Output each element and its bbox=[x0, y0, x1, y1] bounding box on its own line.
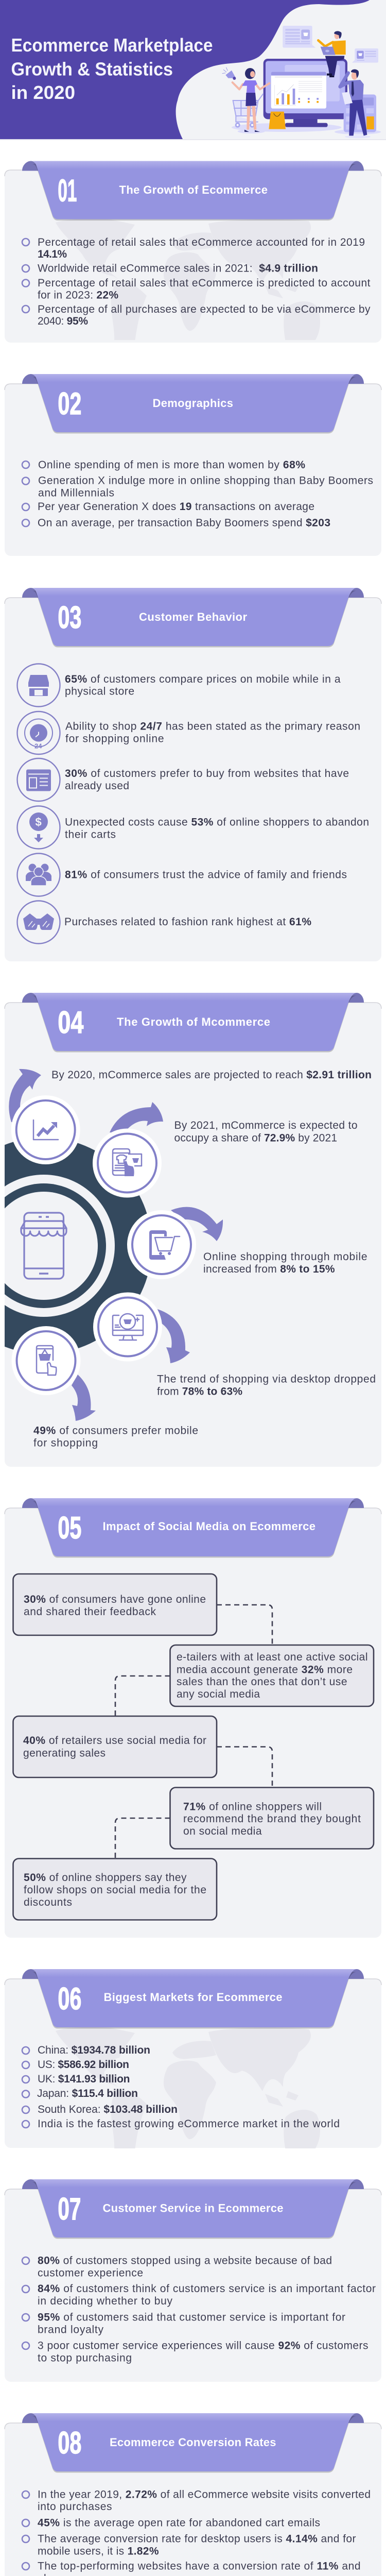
icon: mobile basket bbox=[11, 1326, 80, 1395]
stats list: 80% of customers stopped using a website because of bad bbox=[38, 2255, 332, 2267]
box: shared feedback: 30% of consumers have gone online bbox=[24, 1594, 206, 1605]
text: unexpected costs bbox=[65, 816, 369, 841]
text: mobile shopping growth: Online shopping through mobile bbox=[203, 1251, 367, 1263]
stats list: Percentage of all purchases are expected to be via eCommerce by bbox=[38, 303, 371, 315]
stats list: customer experience bbox=[38, 2267, 143, 2279]
text: fashion: Purchases related to fashion rank highest at 61% bbox=[64, 916, 311, 928]
stats list: 84% of customers think of customers service is an important factor bbox=[38, 2283, 376, 2295]
title bbox=[11, 35, 213, 103]
icon: sunglasses bbox=[17, 901, 60, 944]
text: desktop decline: The trend of shopping via desktop dropped bbox=[157, 1374, 376, 1385]
section heading: The Growth of Mcommerce bbox=[117, 1015, 270, 1028]
text: shop 24/7 bbox=[65, 720, 360, 745]
stats list: The top-performing websites have a conversion rate of 11% and bbox=[38, 2561, 360, 2572]
icon: desktop cart bbox=[93, 1292, 162, 1361]
stats list: into purchases bbox=[38, 2501, 112, 2513]
text: mcommerce share: occupy a share of 72.9% by 2021 bbox=[174, 1132, 337, 1144]
text: mobile shopping growth: increased from 8% to 15% bbox=[203, 1263, 335, 1275]
stats list bbox=[22, 459, 373, 529]
box: retailers: 40% of retailers use social media for bbox=[23, 1735, 206, 1747]
icon: falling dollar: $ bbox=[35, 816, 42, 828]
section heading: Impact of Social Media on Ecommerce bbox=[103, 1520, 315, 1533]
section number 03: 03 bbox=[58, 600, 81, 635]
stats list: to stop purchasing bbox=[38, 2352, 132, 2364]
panel: Demographics bbox=[5, 374, 381, 556]
section heading: Demographics bbox=[152, 397, 233, 410]
icon: family group bbox=[17, 853, 60, 896]
dashed connector B to C bbox=[115, 1676, 170, 1716]
stats list: Per year Generation X does 19 transactions on average bbox=[38, 501, 314, 513]
panel: Customer Service in Ecommerce bbox=[5, 2179, 381, 2382]
title: Growth & Statistics bbox=[11, 59, 173, 79]
section heading: Customer Behavior bbox=[139, 611, 247, 623]
box: e-tailers: media account generate 32% more bbox=[177, 1664, 353, 1675]
icon: 24 hour clock: 24 bbox=[34, 742, 42, 750]
arrow 4 bbox=[157, 1309, 190, 1363]
text: websites already used bbox=[65, 768, 349, 792]
box: shared feedback bbox=[13, 1574, 217, 1635]
text: websites already used: already used bbox=[65, 780, 129, 792]
box: e-tailers: sales than the ones that don’t use bbox=[177, 1676, 347, 1688]
text: unexpected costs: their carts bbox=[65, 828, 116, 841]
markets list: Japan: $115.4 billion bbox=[37, 2088, 138, 2099]
box: recommend brand bbox=[170, 1788, 374, 1849]
dashed connector A to B bbox=[217, 1605, 272, 1645]
markets list: India is the fastest growing eCommerce market in the world bbox=[38, 2118, 340, 2130]
icon: store bbox=[17, 664, 60, 707]
text: unexpected costs: Unexpected costs cause 53% of online shoppers to abandon bbox=[65, 816, 369, 828]
markets list: UK: $141.93 billion bbox=[38, 2073, 130, 2085]
text: sales projection: By 2020, mCommerce sales are projected to reach $2.91 trillion bbox=[51, 1069, 372, 1081]
panel: Impact of Social Media on Ecommerce bbox=[5, 1498, 381, 1938]
panel: The Growth of Mcommerce bbox=[0, 993, 381, 1467]
header illustration bbox=[222, 26, 381, 138]
panel: Ecommerce Conversion Rates bbox=[5, 2413, 381, 2576]
section heading: Customer Service in Ecommerce bbox=[103, 2202, 283, 2214]
stats list: Percentage of retail sales that eCommerce accounted for in 2019 bbox=[38, 236, 365, 248]
stats list: 3 poor customer service experiences will cause 92% of customers bbox=[38, 2340, 369, 2351]
text: prefer mobile: 49% of consumers prefer mobile bbox=[33, 1425, 198, 1436]
stats list: 14.1% bbox=[38, 248, 67, 260]
text: prefer mobile: for shopping bbox=[33, 1437, 98, 1449]
stats list: Worldwide retail eCommerce sales in 2021: $4.9 trillion bbox=[38, 263, 318, 274]
markets list bbox=[22, 2044, 340, 2130]
icon: mobile catalog bbox=[93, 1128, 162, 1197]
icon: mobile cart bbox=[127, 1210, 196, 1279]
title: Ecommerce Marketplace bbox=[11, 35, 213, 56]
icon: website bbox=[17, 758, 60, 801]
section number 05: 05 bbox=[58, 1511, 81, 1545]
markets list: US: $586.92 billion bbox=[38, 2059, 129, 2071]
stats list bbox=[22, 236, 371, 327]
markets list: China: $1934.78 billion bbox=[38, 2044, 150, 2056]
stats list: 95% of customers said that customer service is important for bbox=[38, 2311, 345, 2324]
markets list: South Korea: $103.48 billion bbox=[38, 2104, 178, 2115]
title: in 2020 bbox=[11, 82, 75, 103]
box: retailers bbox=[13, 1716, 217, 1777]
header banner bbox=[0, 0, 386, 140]
icon: falling dollar bbox=[17, 806, 60, 849]
section heading: Ecommerce Conversion Rates bbox=[110, 2436, 276, 2449]
box: retailers: generating sales bbox=[23, 1748, 106, 1759]
text: desktop decline bbox=[157, 1374, 376, 1397]
dashed connector D to E bbox=[115, 1818, 170, 1858]
section heading: Biggest Markets for Ecommerce bbox=[104, 1991, 282, 2004]
stats list: for in 2023: 22% bbox=[38, 290, 118, 301]
stats list: mobile users, it is 1.82% bbox=[38, 2545, 159, 2557]
text: mcommerce share bbox=[174, 1120, 357, 1144]
stats list: 2040: 95% bbox=[38, 315, 88, 327]
text: desktop decline: from 78% to 63% bbox=[157, 1386, 242, 1397]
text: mobile shopping growth bbox=[203, 1251, 367, 1275]
text: compare prices: physical store bbox=[65, 685, 134, 698]
box: follow shops: 50% of online shoppers say they bbox=[24, 1872, 187, 1884]
box: shared feedback: and shared their feedback bbox=[24, 1606, 156, 1618]
box: follow shops bbox=[13, 1859, 217, 1920]
stats list bbox=[22, 2488, 371, 2576]
box: recommend brand: 71% of online shoppers will bbox=[183, 1801, 322, 1812]
section number 01: 01 bbox=[58, 173, 77, 208]
section number 08: 08 bbox=[58, 2426, 81, 2460]
panel: Biggest Markets for Ecommerce bbox=[5, 1969, 381, 2150]
text: mcommerce share: By 2021, mCommerce is expected to bbox=[174, 1120, 357, 1131]
box: e-tailers: any social media bbox=[177, 1688, 260, 1700]
arrow 5 bbox=[72, 1375, 96, 1421]
section number 07: 07 bbox=[58, 2192, 81, 2226]
arrow 1 bbox=[9, 1069, 41, 1123]
box: recommend brand: on social media bbox=[183, 1825, 262, 1837]
section number 02: 02 bbox=[58, 386, 81, 421]
text: prefer mobile bbox=[33, 1425, 198, 1449]
icon: growth chart bbox=[11, 1095, 80, 1164]
icon: 24 hour clock bbox=[17, 711, 60, 754]
stats list: Online spending of men is more than women by 68% bbox=[38, 459, 305, 471]
text: shop 24/7: for shopping online bbox=[65, 733, 164, 745]
text: family and friends: 81% of consumers trust the advice of family and friends bbox=[65, 869, 347, 881]
stats list: and Millennials bbox=[38, 487, 114, 499]
stats list: In the year 2019, 2.72% of all eCommerce website visits converted bbox=[38, 2488, 371, 2501]
stats list: brand loyalty bbox=[38, 2324, 104, 2336]
box: follow shops: discounts bbox=[24, 1896, 72, 1908]
radial hub: mobile shop bbox=[0, 1138, 152, 1354]
stats list: Generation X indulge more in online shopping than Baby Boomers bbox=[38, 475, 373, 486]
section number 04: 04 bbox=[58, 1005, 84, 1040]
stats list bbox=[22, 2255, 376, 2364]
panel: The Growth of Ecommerce bbox=[5, 161, 381, 343]
stats list: in deciding whether to buy bbox=[38, 2295, 173, 2307]
stats list: Percentage of retail sales that eCommerce is predicted to account bbox=[38, 277, 371, 289]
box: e-tailers: e-tailers with at least one active social bbox=[177, 1651, 367, 1663]
text: websites already used: 30% of customers prefer to buy from websites that have bbox=[65, 768, 349, 779]
text: compare prices: 65% of customers compare prices on mobile while in a bbox=[65, 673, 341, 685]
section number 06: 06 bbox=[58, 1981, 81, 2016]
section heading: The Growth of Ecommerce bbox=[119, 183, 268, 196]
stats list: The average conversion rate for desktop users is 4.14% and for bbox=[38, 2533, 356, 2545]
text: shop 24/7: Ability to shop 24/7 has been stated as the primary reason bbox=[65, 720, 360, 733]
arrow 2 bbox=[110, 1102, 163, 1133]
box: e-tailers bbox=[170, 1645, 374, 1706]
text: compare prices bbox=[65, 673, 341, 698]
arrow 3 bbox=[171, 1207, 223, 1241]
panel: Customer Behavior bbox=[5, 588, 381, 961]
stats list: On an average, per transaction Baby Boomers spend $203 bbox=[38, 517, 330, 529]
box: follow shops: follow shops on social media for the bbox=[24, 1884, 206, 1896]
dashed connector C to D bbox=[217, 1747, 272, 1787]
stats list: 45% is the average open rate for abandoned cart emails bbox=[38, 2517, 320, 2529]
box: recommend brand: recommend the brand they bought bbox=[183, 1813, 361, 1825]
